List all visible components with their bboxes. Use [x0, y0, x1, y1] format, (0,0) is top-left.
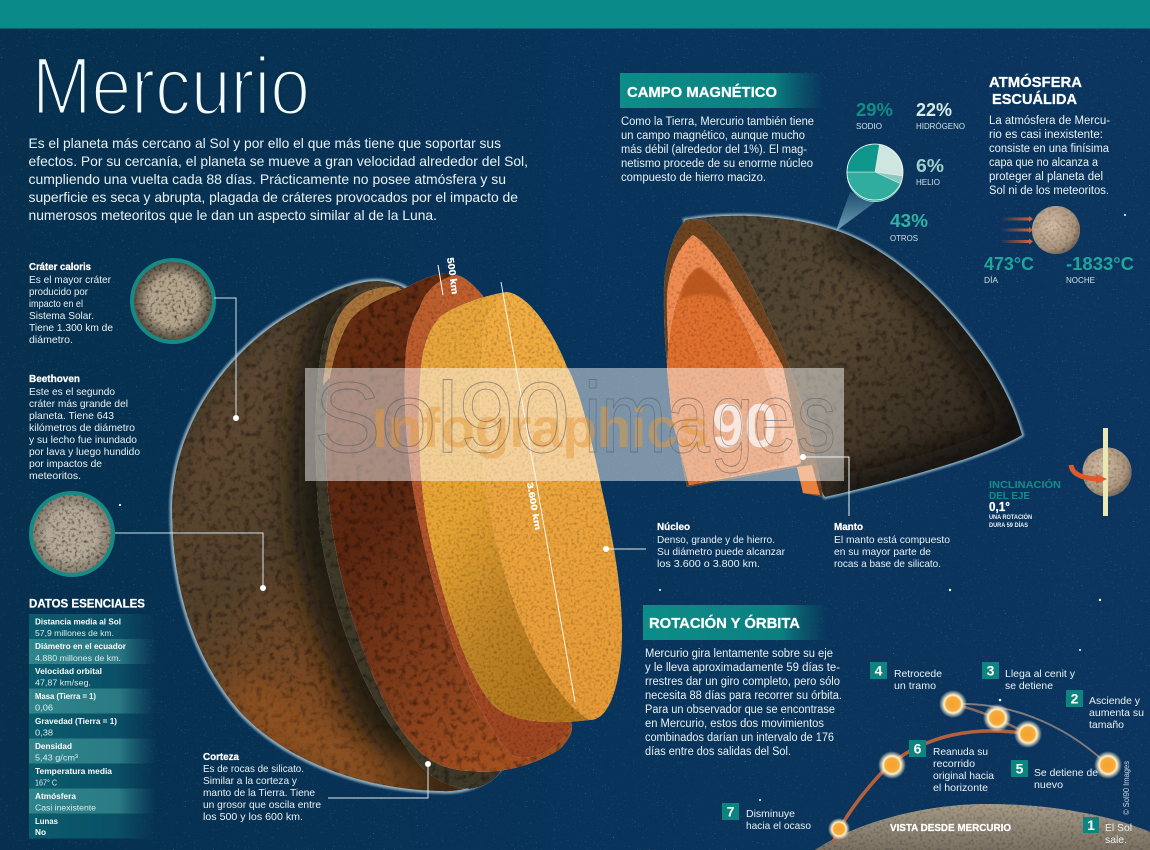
caption: Sistema Solar. — [29, 310, 94, 322]
mantle section — [667, 235, 801, 485]
label: sodio: SODIO — [856, 121, 882, 131]
mantle side surface — [326, 273, 572, 772]
leader line — [606, 548, 646, 550]
step 3 — [982, 662, 1076, 692]
data rows: Distancia media al Sol — [35, 616, 121, 626]
caption: en su mayor parte de — [834, 546, 931, 558]
leader dot — [425, 761, 431, 767]
crater photo 1 — [132, 260, 214, 342]
sun path: descent — [833, 731, 1028, 842]
data rows: Masa (Tierra = 1) — [35, 691, 96, 701]
panel: rotacion y orbita — [643, 605, 842, 758]
day temperature — [984, 254, 1034, 285]
caption: diámetro. — [29, 334, 73, 346]
leader line — [328, 764, 428, 798]
step 4: Retrocede — [894, 668, 942, 680]
caption: Denso, grande y de hierro. — [657, 534, 775, 546]
step 7: Disminuye — [746, 808, 795, 820]
body text: Como la Tierra, Mercurio también tiene — [621, 116, 814, 128]
body text: compuesto de hierro macizo. — [621, 172, 766, 184]
mantle cut face — [405, 275, 572, 758]
callout: nucleo — [603, 521, 785, 570]
axis inclination — [989, 428, 1132, 529]
step 1: El Sol — [1105, 822, 1132, 834]
horizon ground — [815, 804, 1150, 850]
caption: Corteza — [203, 751, 239, 763]
step 1: 1 — [1087, 817, 1095, 833]
leader line — [214, 298, 236, 418]
step 7 — [722, 803, 811, 832]
crater beethoven — [29, 373, 266, 591]
label: helio — [916, 156, 944, 187]
step 7: 7 — [727, 804, 735, 820]
caption: rocas a base de silicato. — [834, 558, 941, 570]
core hollow — [667, 267, 785, 485]
cut rim — [664, 220, 823, 497]
panel: datos esenciales — [29, 596, 157, 838]
data rows: Atmósfera — [35, 791, 76, 801]
body text — [989, 115, 1110, 197]
caption — [834, 521, 950, 570]
crust inner ochre patch — [323, 287, 403, 385]
icon: sun rays arrows — [1000, 216, 1033, 244]
data rows: Densidad — [35, 741, 72, 751]
caption: manto de la Tierra. Tiene — [203, 787, 315, 799]
caption: kilómetros de diámetro — [29, 422, 135, 434]
data rows: 167° C — [35, 778, 57, 788]
leader dot — [233, 415, 239, 421]
3600 km label — [501, 282, 575, 702]
body text: un campo magnético, aunque mucho — [621, 130, 805, 142]
label: hidrogeno — [916, 100, 965, 131]
step 3: 3 — [987, 662, 995, 678]
body text: Sol ni de los meteoritos. — [989, 185, 1109, 197]
data rows: Temperatura media — [35, 766, 112, 776]
sun path: retrograde — [953, 704, 1028, 734]
leader dot — [800, 454, 806, 460]
data rows: 4.880 millones de km. — [35, 653, 121, 663]
leader dot — [603, 546, 609, 552]
heading band: ROTACIÓN Y ÓRBITA — [649, 614, 801, 632]
data rows: No — [35, 827, 46, 837]
body text: rrestres dar un giro completo, pero sólo — [645, 676, 840, 688]
heading band — [620, 73, 825, 108]
caption: los 3.600 o 3.800 km. — [657, 558, 760, 570]
body text: Para un observador que se encontrase — [645, 704, 835, 716]
watermark: Sol90 — [314, 362, 570, 474]
body text — [645, 648, 842, 758]
caption: Manto — [834, 521, 863, 533]
panel: campo magnetico — [620, 73, 825, 184]
heading: ATMÓSFERA — [989, 73, 1082, 91]
body text — [621, 116, 814, 184]
step 5: Se detiene de — [1034, 767, 1098, 779]
pie slices — [847, 144, 903, 202]
caption: cráter más grande del — [29, 398, 128, 410]
crust section — [316, 287, 503, 789]
label: UNA ROTACIÓN — [989, 513, 1032, 521]
crater caloris — [29, 260, 239, 421]
heading band: CAMPO MAGNÉTICO — [627, 84, 777, 101]
step 5: nuevo — [1034, 779, 1063, 791]
data rows: 5,43 g/cm³ — [35, 752, 78, 762]
watermark: Infographics — [372, 396, 709, 459]
body text: consiste en una finísima — [989, 143, 1110, 155]
caption: meteoritos. — [29, 470, 81, 482]
step 1: sale. — [1105, 834, 1127, 846]
body text: Mercurio gira lentamente sobre su eje — [645, 648, 833, 660]
step 2: Asciende y — [1089, 695, 1141, 707]
label: hidrogeno: HIDRÓGENO — [916, 121, 965, 131]
step 2 — [1066, 690, 1144, 731]
label: helio: 6% — [916, 156, 944, 176]
data rows: Gravedad (Tierra = 1) — [35, 716, 117, 726]
label: sodio: 29% — [856, 100, 893, 120]
intro text: efectos. Por su cercanía, el planeta se mueve a gran velocidad alrededor del Sol, — [28, 153, 528, 169]
data rows: 57,9 millones de km. — [35, 628, 114, 638]
label: hidrogeno: 22% — [916, 100, 952, 120]
core cut face — [480, 292, 622, 720]
label: INCLINACIÓN — [989, 478, 1061, 491]
step 5: 5 — [1016, 760, 1024, 776]
label: DURA 59 DÍAS — [989, 521, 1028, 529]
caption: impacto en el — [29, 298, 83, 310]
rocky dome — [685, 216, 1022, 497]
body text: La atmósfera de Mercu- — [989, 115, 1110, 127]
label: sodio — [856, 100, 893, 131]
label: otros: OTROS — [890, 233, 918, 243]
step 2: tamaño — [1089, 719, 1124, 731]
label: DEL EJE — [989, 490, 1030, 502]
watermark: images — [584, 362, 836, 474]
arrow head — [1096, 474, 1107, 484]
day temperature: DÍA — [984, 275, 998, 285]
body text: netismo procede de su enorme núcleo — [621, 158, 813, 170]
copyright credit: © Sol90 Images — [1122, 761, 1131, 815]
heading — [989, 73, 1082, 108]
title: Mercurio — [32, 41, 310, 132]
caption: Su diámetro puede alcanzar — [657, 546, 785, 558]
icon: planet — [1082, 448, 1132, 496]
body text: necesita 88 días para recorrer su órbita. — [645, 690, 842, 702]
panel: atmosfera escualida — [984, 73, 1134, 285]
intro text — [28, 135, 528, 223]
heading band — [643, 605, 828, 640]
outer dome shell — [172, 281, 503, 791]
label: otros: 43% — [890, 211, 928, 231]
caption: un grosor que oscila entre — [203, 799, 321, 811]
watermark — [305, 362, 844, 481]
data rows: 0,38 — [35, 728, 53, 738]
body text: más débil (alrededor del 1%). El mag- — [621, 144, 807, 156]
beam — [836, 192, 878, 231]
step 5 — [1011, 760, 1098, 791]
caption: Es de rocas de silicato. — [203, 763, 304, 775]
3600 km label: 3.600 km — [525, 482, 543, 531]
step 3: Llega al cenit y — [1005, 668, 1076, 680]
500 km label: 500 km — [444, 257, 460, 295]
caption: y su lecho fue inundado — [29, 434, 137, 446]
suns — [828, 690, 1122, 840]
leader line — [803, 457, 849, 516]
data rows: Velocidad orbital — [35, 666, 102, 676]
caption: planeta. Tiene 643 — [29, 410, 114, 422]
step 6 — [909, 740, 994, 794]
callout: corteza — [203, 751, 431, 823]
step 3: se detiene — [1005, 680, 1053, 692]
arrow: rotation — [1071, 465, 1096, 479]
heading: ESCUÁLIDA — [992, 91, 1077, 108]
label: otros — [890, 211, 928, 243]
caption — [29, 373, 140, 482]
body text: rio es casi inexistente: — [989, 129, 1103, 141]
body text: en Mercurio, estos dos movimientos — [645, 718, 824, 730]
500 km label — [438, 257, 460, 295]
data rows — [29, 614, 157, 838]
caption: por impactos de — [29, 458, 102, 470]
data rows: Diámetro en el ecuador — [35, 641, 127, 651]
step 4 — [870, 662, 942, 692]
icon: axis bar — [1103, 428, 1108, 516]
caption — [203, 751, 321, 823]
night temperature: NOCHE — [1066, 275, 1095, 285]
body text: y le lleva aproximadamente 59 días te- — [645, 662, 840, 674]
main cutaway planet — [172, 257, 622, 791]
data rows: 47,87 km/seg. — [35, 678, 91, 688]
caption: Similar a la corteza y — [203, 775, 298, 787]
step 2: aumenta su — [1089, 707, 1144, 719]
caption: por lava y luego hundido — [29, 446, 140, 458]
data rows: Lunas — [35, 816, 58, 826]
caption: los 500 y los 600 km. — [203, 811, 303, 823]
intro text: cumpliendo una vuelta cada 88 días. Prácticamente no posee atmósfera y su — [28, 171, 506, 187]
step 6: 6 — [914, 740, 922, 756]
caption: Este es el segundo — [29, 386, 115, 398]
sun path: ascent — [953, 704, 1108, 765]
core side surface — [419, 292, 590, 722]
step 6: Reanuda su — [933, 746, 988, 758]
datos heading: DATOS ESENCIALES — [29, 596, 145, 610]
step 6: original hacia — [933, 770, 994, 782]
intro text: superficie es seca y abrupta, plagada de cráteres provocados por el impacto de — [28, 189, 518, 205]
body text: capa que no alcanza a — [989, 157, 1099, 169]
label: 0,1° — [989, 500, 1010, 514]
body text: combinados darían un intervalo de 176 — [645, 732, 834, 744]
diagram: view from mercury — [722, 662, 1150, 850]
crater photo 2 — [31, 493, 113, 575]
body text: días entre dos salidas del Sol. — [645, 746, 791, 758]
label: helio: HELIO — [916, 177, 940, 187]
caption: Cráter caloris — [29, 261, 91, 273]
callout: manto — [800, 454, 950, 570]
hollow upper shade — [680, 267, 735, 305]
step 6: el horizonte — [933, 782, 988, 794]
step 1 — [1083, 817, 1132, 846]
body text: proteger al planeta del — [989, 171, 1103, 183]
caption: Núcleo — [657, 521, 690, 533]
leader line — [115, 533, 263, 588]
intro text: numerosos meteoritos que le dan un aspecto similar al de la Luna. — [28, 207, 437, 223]
data rows: Casi inexistente — [35, 802, 96, 812]
caption: Beethoven — [29, 373, 80, 385]
intro text: Es el planeta más cercano al Sol y por ello el que más tiene que soportar sus — [28, 135, 501, 151]
top band — [0, 0, 1150, 28]
caption: producido por — [29, 286, 88, 298]
step 4: un tramo — [894, 680, 936, 692]
ground label: VISTA DESDE MERCURIO — [890, 823, 1011, 834]
step 2: 2 — [1071, 690, 1079, 706]
step 4: 4 — [875, 662, 883, 678]
icon: small mercury — [1032, 206, 1080, 254]
night temperature: -1833°C — [1066, 254, 1134, 274]
pie chart: atmosphere composition — [836, 100, 965, 243]
night temperature — [1066, 254, 1134, 285]
caption: El manto está compuesto — [834, 534, 950, 546]
step 6: recorrido — [933, 758, 975, 770]
mantle bottom strip — [797, 465, 820, 495]
right cutaway hemisphere — [664, 216, 1022, 497]
data rows: 0,06 — [35, 702, 53, 712]
leader dot — [260, 585, 266, 591]
caption: Es el mayor cráter — [29, 274, 111, 286]
label — [989, 478, 1061, 529]
caption: Tiene 1.300 km de — [29, 322, 113, 334]
watermark: 90 — [712, 392, 777, 461]
caption — [29, 261, 113, 346]
step 7: hacia el ocaso — [746, 820, 811, 832]
caption — [657, 521, 785, 570]
day temperature: 473°C — [984, 254, 1034, 274]
